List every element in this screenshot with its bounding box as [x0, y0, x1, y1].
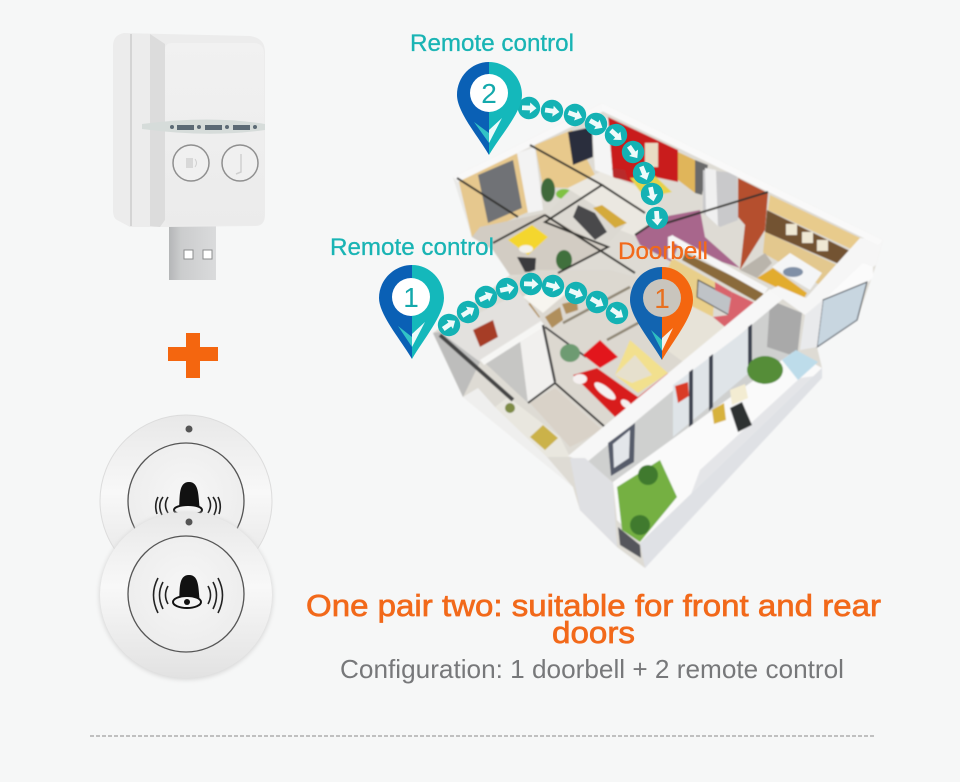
indicator lights [170, 125, 257, 130]
right room grey floor [740, 253, 772, 278]
balcony back corner [782, 350, 818, 380]
balcony cream seat [730, 384, 748, 405]
music button [222, 145, 258, 181]
side dark window [738, 185, 752, 222]
glass frame lower [528, 383, 605, 427]
balcony chair [730, 402, 752, 432]
balcony grey steps [690, 376, 815, 497]
floor stripe two [607, 322, 640, 340]
garden [617, 460, 677, 542]
bathroom tile [485, 340, 528, 403]
usb plug [169, 225, 216, 280]
door mullion one [689, 369, 693, 428]
dining table [523, 283, 570, 313]
side strip shade [150, 34, 165, 227]
glass frame vertical [543, 325, 555, 382]
yellow sofa back room [630, 176, 672, 198]
indicator band [142, 120, 265, 134]
volume button [173, 145, 209, 181]
glass frame diagonal [440, 335, 513, 400]
right beige wall [768, 195, 860, 250]
white column [517, 147, 543, 213]
map pin: remote 2: 2 [481, 78, 497, 109]
right window [817, 282, 867, 347]
floor plan base [433, 103, 883, 568]
pink wall left [715, 282, 732, 298]
kitchen tv panel [697, 280, 732, 315]
doorbell button: front [99, 512, 273, 680]
left room wall [458, 153, 528, 237]
white bed [772, 253, 822, 290]
floor plan illustration [433, 103, 883, 568]
balcony rail [640, 368, 822, 568]
map pin: remote 1 [379, 265, 444, 359]
main dividing wall top [568, 289, 784, 463]
yellow bed [508, 225, 548, 255]
red sofa [573, 368, 670, 417]
right outer wall strip [800, 300, 823, 350]
heading [306, 588, 881, 650]
label: remote control 2: Remote control [410, 30, 574, 57]
kitchen floor [660, 290, 725, 367]
balcony floor [613, 352, 822, 543]
map pin: remote 1: 1 [403, 282, 419, 313]
left wall cap [453, 177, 480, 237]
dining chairs [517, 300, 578, 328]
bed pillow [519, 245, 533, 253]
bell icon front [154, 575, 222, 613]
glass frame top [545, 327, 586, 357]
glass highlight [705, 168, 718, 226]
balcony small window [608, 423, 635, 476]
back dark window [568, 127, 593, 165]
right white block [827, 263, 873, 307]
upper roof wall left [453, 103, 606, 182]
label: remote control 1: Remote control [330, 234, 494, 261]
silver glass partition [703, 170, 738, 227]
coffee table centre [615, 355, 652, 383]
label: doorbell: Doorbell [618, 238, 708, 265]
red sideboard [612, 168, 628, 180]
garden bush [638, 465, 658, 485]
tan rug [593, 205, 627, 228]
bathroom white door [520, 327, 555, 403]
garden bush lower [630, 515, 650, 535]
yellow strip wall [678, 152, 695, 193]
purple glass room [635, 210, 740, 268]
door mullion two [709, 354, 713, 411]
arrow trail: remote 1 to doorbell [433, 272, 633, 341]
red block [583, 340, 618, 368]
upper-left living floor [437, 293, 543, 362]
central floor [545, 190, 625, 247]
dark back window [695, 160, 708, 195]
bell icon rear [156, 482, 220, 515]
tv unit [573, 205, 607, 240]
plus sign [168, 333, 218, 378]
stove [530, 425, 558, 450]
receiver body [113, 33, 265, 227]
partition end [668, 235, 673, 260]
kitchen counter [495, 397, 570, 457]
arrow trail: remote 2 to doorbell [517, 96, 669, 230]
wall picture [645, 143, 658, 167]
green chair [556, 189, 572, 199]
white curtain wall [592, 118, 613, 177]
pink wall [713, 292, 755, 327]
balcony plants [747, 356, 783, 384]
floor stripe one [563, 287, 630, 323]
end wall slot [618, 527, 641, 558]
dark picture strip [765, 210, 852, 268]
left bedroom floor [472, 213, 605, 275]
heading: One pair two: suitable for front and rear [306, 588, 881, 623]
balcony round table [712, 403, 726, 424]
wall pictures [786, 224, 828, 251]
upper room floor [568, 172, 668, 238]
orange wall [738, 178, 768, 270]
map pin: remote 2 [457, 62, 522, 155]
bathroom wall top [480, 321, 545, 365]
living rug [615, 340, 668, 393]
living plant [560, 344, 580, 362]
product: usb receiver [113, 33, 265, 280]
headboard wall [763, 232, 848, 285]
counter plant [505, 403, 515, 413]
heading: doors [552, 615, 635, 650]
seam [130, 34, 132, 226]
door mullion three [748, 324, 752, 374]
plant by wall [541, 178, 555, 202]
dark cabinet [517, 257, 536, 272]
left room window [478, 160, 522, 223]
configuration text: Configuration: 1 doorbell + 2 remote control [340, 654, 844, 684]
food shelf [682, 253, 765, 302]
sofa white pillows [573, 374, 633, 410]
back beige wall [535, 130, 595, 188]
right wall top [770, 238, 883, 315]
tan floor [530, 388, 602, 447]
dark corner brick [767, 300, 802, 357]
yellow throw [757, 268, 807, 300]
doorbell button: rear [100, 415, 272, 587]
map pin: doorbell [630, 267, 693, 360]
balcony back brick wall [585, 300, 802, 482]
balcony window pane [613, 430, 630, 468]
map pin: doorbell: 1 [654, 283, 670, 314]
dark floor lines [457, 145, 768, 273]
lower living floor [500, 270, 690, 447]
outer bathroom wall [433, 332, 480, 397]
kitchen wall [660, 258, 715, 317]
sliding door [673, 327, 750, 437]
plant bedroom [556, 250, 572, 270]
red feature wall [608, 117, 678, 185]
red chair on wall [675, 382, 689, 403]
front end wall [570, 458, 617, 547]
centre partition wall [672, 235, 768, 294]
upper roof wall right [602, 103, 883, 245]
front face [165, 43, 264, 225]
wall picture red [473, 320, 498, 347]
outer strip [463, 388, 573, 487]
bed blue throw [783, 267, 803, 277]
